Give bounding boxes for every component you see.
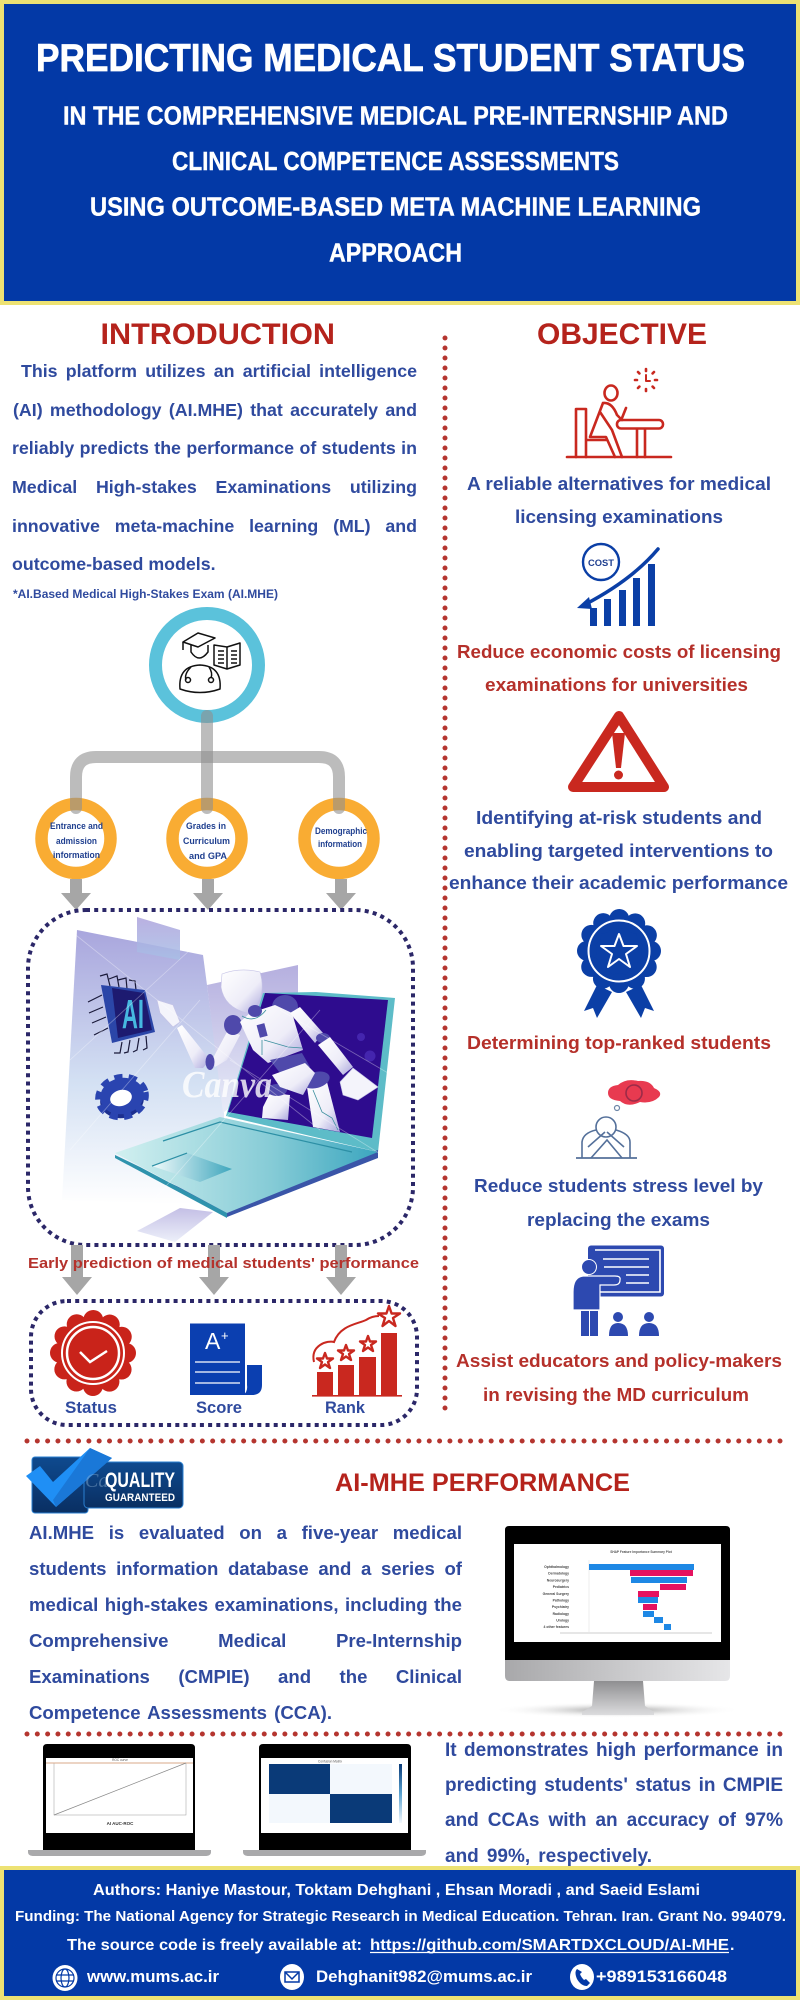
watermark: [70, 932, 400, 1225]
icon: award badge: [583, 915, 655, 1018]
accuracy paragraph: predicting students' status in CMPIE: [445, 1775, 783, 1796]
contact: email: [280, 1964, 532, 1990]
monitor: SHAP chart: Psychiatry: [552, 1605, 569, 1609]
panel: introduction: [12, 318, 419, 1427]
objective text 3: Identifying at-risk students and: [476, 808, 762, 828]
intro paragraph: [12, 361, 417, 574]
node: grades in curriculum and GPA: and GPA: [189, 851, 227, 862]
arrows to outputs: [62, 1245, 356, 1295]
footer banner: [0, 1866, 800, 2000]
icon: cost chart: COST: [588, 558, 614, 569]
monitor: SHAP chart: Radiology: [553, 1612, 569, 1616]
evaluation paragraph: students information database and a series of: [29, 1558, 462, 1579]
node: demographic information: information: [318, 839, 362, 850]
contact: email: Dehghanit982@mums.ac.ir: [316, 1967, 532, 1986]
intro paragraph: reliably predicts the performance of students in: [12, 438, 417, 458]
laptop: ROC curve: [28, 1744, 211, 1856]
node: grades in curriculum and GPA: Curriculum: [183, 836, 230, 847]
contact: website: [52, 1965, 219, 1991]
laptop: [115, 992, 395, 1218]
objective text 3: [449, 808, 788, 893]
evaluation paragraph: Examinations (CMPIE) and the Clinical: [29, 1666, 462, 1687]
objective text 2: [457, 642, 781, 695]
objective text 3: enabling targeted interventions to: [464, 841, 773, 861]
evaluation paragraph: [29, 1522, 462, 1723]
intro paragraph: innovative meta-machine learning (ML) and: [12, 516, 417, 536]
objective text 1: A reliable alternatives for medical: [467, 474, 771, 494]
subtitle: APPROACH: [329, 238, 462, 268]
arrows into AI model: [61, 879, 356, 910]
chip: AI: [122, 991, 144, 1037]
monitor: SHAP chart: 4 other features: [544, 1625, 569, 1629]
icon: quality guaranteed badge: GUARANTEED: [105, 1492, 175, 1504]
footnote: *AI.Based Medical High-Stakes Exam (AI.MHE): [13, 589, 278, 601]
icon: teacher at board: [573, 1246, 664, 1336]
authors: Authors: Haniye Mastour, Toktam Dehghani , Ehsan Moradi , and Saeid Eslami: [93, 1882, 700, 1899]
monitor: SHAP chart: [492, 1526, 742, 1718]
gear: [95, 1073, 149, 1122]
intro paragraph: This platform utilizes an artificial intelligence: [21, 361, 417, 381]
output: score: +: [221, 1328, 229, 1343]
subtitle: CLINICAL COMPETENCE ASSESSMENTS: [172, 146, 619, 176]
subtitle: IN THE COMPREHENSIVE MEDICAL PRE-INTERNSHIP AND: [63, 100, 728, 130]
evaluation paragraph: medical high-stakes examinations, including the: [29, 1594, 462, 1615]
icon: stressed student: [576, 1080, 660, 1158]
laptop: confusion matrix: [243, 1744, 426, 1856]
laptop: ROC curve: ROC curve: [112, 1758, 128, 1762]
panel: objective: [449, 318, 788, 1405]
output: rank: Rank: [325, 1398, 366, 1417]
source code: The source code is freely available at:: [67, 1937, 362, 1954]
evaluation paragraph: AI.MHE is evaluated on a five-year medical: [29, 1522, 462, 1543]
evaluation paragraph: Comprehensive Medical Pre-Internship: [29, 1630, 462, 1651]
monitor: SHAP chart: Pathology: [553, 1598, 569, 1602]
title: PREDICTING MEDICAL STUDENT STATUS: [36, 37, 745, 80]
objective text 6: in revising the MD curriculum: [483, 1385, 749, 1405]
objective text 5: [474, 1176, 763, 1230]
objective text 5: Reduce students stress level by: [474, 1176, 763, 1196]
contact: website: www.mums.ac.ir: [86, 1967, 219, 1986]
header banner: [0, 0, 800, 305]
flow diagram: [13, 589, 419, 1427]
contact: phone: [570, 1964, 727, 1990]
objective text 2: examinations for universities: [485, 675, 748, 695]
source code: .: [730, 1937, 734, 1954]
watermark: Canva: [182, 1064, 272, 1106]
icon: quality guaranteed badge: [26, 1448, 183, 1513]
output: status: [57, 1317, 129, 1417]
connector tree: [76, 716, 339, 808]
AI illustration: [62, 917, 400, 1242]
laptop: ROC curve: AI AUC-ROC: [107, 1821, 134, 1826]
node: entrance and admission information: Entrance and: [50, 821, 103, 832]
evaluation paragraph: Competence Assessments (CCA).: [29, 1702, 332, 1723]
node: demographic information: Demographic: [315, 826, 367, 837]
intro paragraph: (AI) methodology (AI.MHE) that accurately and: [13, 400, 417, 420]
caption: early prediction: Early prediction of medical students' performance: [28, 1255, 419, 1272]
node: demographic information: [304, 804, 374, 873]
output: score: [190, 1324, 262, 1417]
monitor: SHAP chart: SHAP Feature Importance Summary Plot: [610, 1550, 673, 1554]
funding: Funding: The National Agency for Strategic Research in Medical Education. Tehran. Iran. Grant No. 994079.: [15, 1908, 786, 1925]
objective text 5: replacing the exams: [527, 1210, 710, 1230]
output: status: Status: [65, 1398, 117, 1417]
accuracy paragraph: [445, 1740, 783, 1867]
monitor: SHAP chart: Neurosurgery: [547, 1578, 569, 1582]
intro paragraph: Medical High-stakes Examinations utilizing: [12, 477, 417, 497]
node: entrance and admission information: admission: [56, 836, 97, 847]
accuracy paragraph: It demonstrates high performance in: [445, 1740, 783, 1761]
icon: student and doctor circle: [156, 614, 258, 716]
monitor: SHAP chart: General Surgery: [543, 1592, 569, 1596]
accuracy paragraph: and CCAs with an accuracy of 97%: [445, 1810, 783, 1831]
node: grades in curriculum and GPA: [172, 804, 242, 873]
subtitle: USING OUTCOME-BASED META MACHINE LEARNING: [90, 192, 701, 222]
subtitle: [63, 100, 728, 268]
output: rank: [312, 1306, 402, 1417]
monitor: SHAP chart: Pediatrics: [553, 1585, 569, 1589]
objective text 2: Reduce economic costs of licensing: [457, 642, 781, 662]
monitor: SHAP chart: Urology: [556, 1618, 569, 1622]
heading: introduction: INTRODUCTION: [100, 318, 335, 351]
monitor: SHAP chart: Ophthalmology: [544, 1565, 569, 1569]
heading: objective: OBJECTIVE: [537, 318, 707, 351]
icon: warning triangle: [573, 716, 664, 787]
contact: phone: +989153166048: [596, 1967, 727, 1986]
source code: https://github.com/SMARTDXCLOUD/AI-MHE: [370, 1937, 729, 1954]
icon: student writing: [567, 369, 671, 457]
laptop: confusion matrix: Confusion Matrix: [318, 1760, 342, 1764]
robot: [157, 970, 378, 1132]
icon: quality guaranteed badge: QUALITY: [105, 1469, 175, 1492]
objective text 1: [467, 474, 771, 527]
node: entrance and admission information: [42, 804, 110, 873]
output: score: A: [205, 1328, 221, 1354]
outputs frame: [31, 1301, 417, 1425]
objective text 1: licensing examinations: [515, 507, 723, 527]
objective text 3: enhance their academic performance: [449, 873, 788, 893]
node: entrance and admission information: information: [53, 850, 100, 861]
node: grades in curriculum and GPA: Grades in: [186, 821, 226, 832]
heading: AI-MHE performance: AI-MHE PERFORMANCE: [335, 1469, 630, 1497]
accuracy paragraph: and 99%, respectively.: [445, 1846, 652, 1867]
objective text 4: Determining top-ranked students: [467, 1033, 771, 1053]
output: score: Score: [196, 1398, 242, 1417]
intro paragraph: outcome-based models.: [12, 554, 216, 574]
panel: AI-MHE performance: [26, 1448, 783, 1867]
icon: quality guaranteed badge: Ca: [85, 1470, 108, 1492]
source code: [67, 1937, 734, 1954]
icon: cost chart: [577, 544, 658, 626]
objective text 6: Assist educators and policy-makers: [456, 1351, 782, 1371]
chip: [88, 974, 155, 1053]
objective text 6: [456, 1351, 782, 1405]
dashed AI model frame: [28, 910, 413, 1245]
monitor: SHAP chart: Dermatology: [548, 1572, 569, 1576]
